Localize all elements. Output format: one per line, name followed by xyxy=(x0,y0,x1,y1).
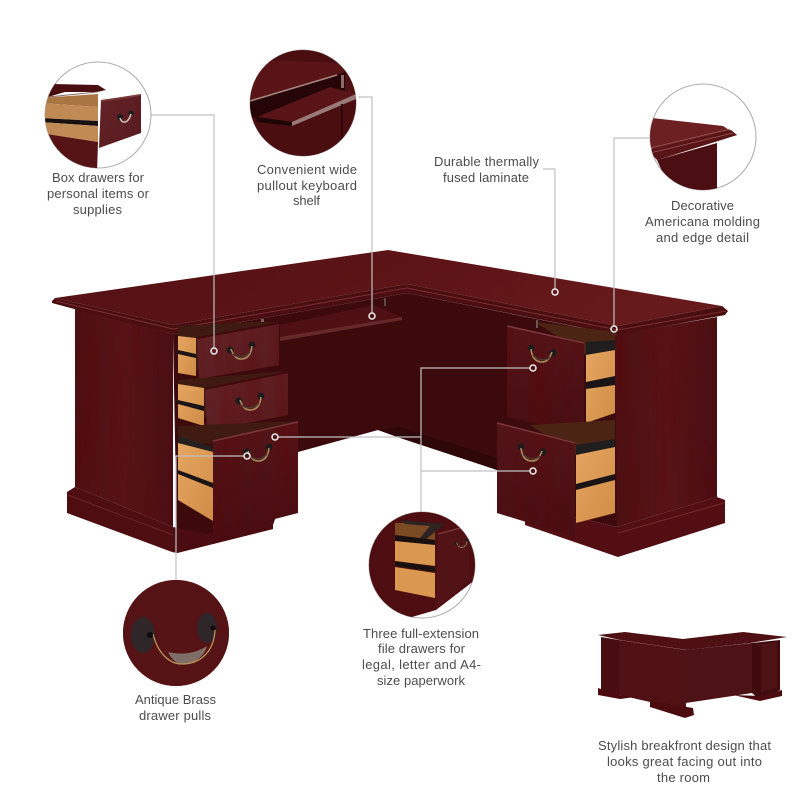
text: durable laminate: fused laminate xyxy=(443,170,529,185)
inset: drawer pull close-up xyxy=(123,580,229,686)
right plinth xyxy=(525,497,725,557)
panel: box drawers xyxy=(40,62,151,217)
middle left drawer xyxy=(178,371,288,431)
caption: file drawers for xyxy=(378,641,466,656)
caption: looks great facing out into xyxy=(607,754,762,769)
desktop surface xyxy=(55,250,722,326)
caption: Three full-extension xyxy=(363,626,479,641)
caption: Antique Brass xyxy=(135,692,216,707)
caption: size paperwork xyxy=(377,673,466,688)
caption: pullout keyboard xyxy=(257,178,357,193)
caption xyxy=(362,626,481,688)
inset: molding close-up xyxy=(648,84,756,193)
panel: keyboard shelf xyxy=(248,50,357,208)
caption: personal items or xyxy=(47,186,150,201)
inset: box drawer close-up xyxy=(40,62,151,172)
caption xyxy=(598,738,771,785)
main L-shaped desk xyxy=(52,250,728,557)
right pedestal side panel xyxy=(615,317,717,527)
caption xyxy=(135,692,216,723)
upper left drawer xyxy=(178,322,279,379)
small desk rear view xyxy=(598,632,787,718)
lower right file drawer xyxy=(497,420,615,537)
caption: drawer pulls xyxy=(139,708,212,723)
left pedestal side panel xyxy=(75,308,173,527)
molded edge xyxy=(52,284,728,335)
panel: antique brass pulls xyxy=(123,580,229,723)
panel: breakfront rear view xyxy=(598,632,787,785)
caption xyxy=(257,162,357,208)
caption xyxy=(645,198,760,245)
upper right file drawer xyxy=(507,320,615,433)
text: durable laminate: Durable thermally xyxy=(434,154,540,169)
panel: file drawers xyxy=(362,512,481,688)
toe kick under the corner xyxy=(378,427,497,470)
caption: supplies xyxy=(73,202,122,217)
caption: Decorative xyxy=(671,198,734,213)
caption: the room xyxy=(657,770,710,785)
desk interior back panels xyxy=(173,293,617,545)
leader lines and marker dots xyxy=(151,97,649,580)
text: durable laminate xyxy=(434,154,540,185)
keyboard shelf xyxy=(261,298,402,341)
inset: file drawer close-up xyxy=(369,512,475,620)
caption: and edge detail xyxy=(656,230,749,245)
caption: Box drawers for xyxy=(52,170,145,185)
caption: Americana molding xyxy=(645,214,760,229)
inset: keyboard shelf close-up xyxy=(248,50,356,156)
caption: legal, letter and A4- xyxy=(362,657,481,672)
caption xyxy=(47,170,150,217)
panel: molding xyxy=(645,84,760,245)
lower left file drawer xyxy=(178,421,298,535)
caption: shelf xyxy=(293,193,320,208)
caption: Convenient wide xyxy=(257,162,357,177)
left plinth xyxy=(67,487,273,553)
caption: Stylish breakfront design that xyxy=(598,738,771,753)
